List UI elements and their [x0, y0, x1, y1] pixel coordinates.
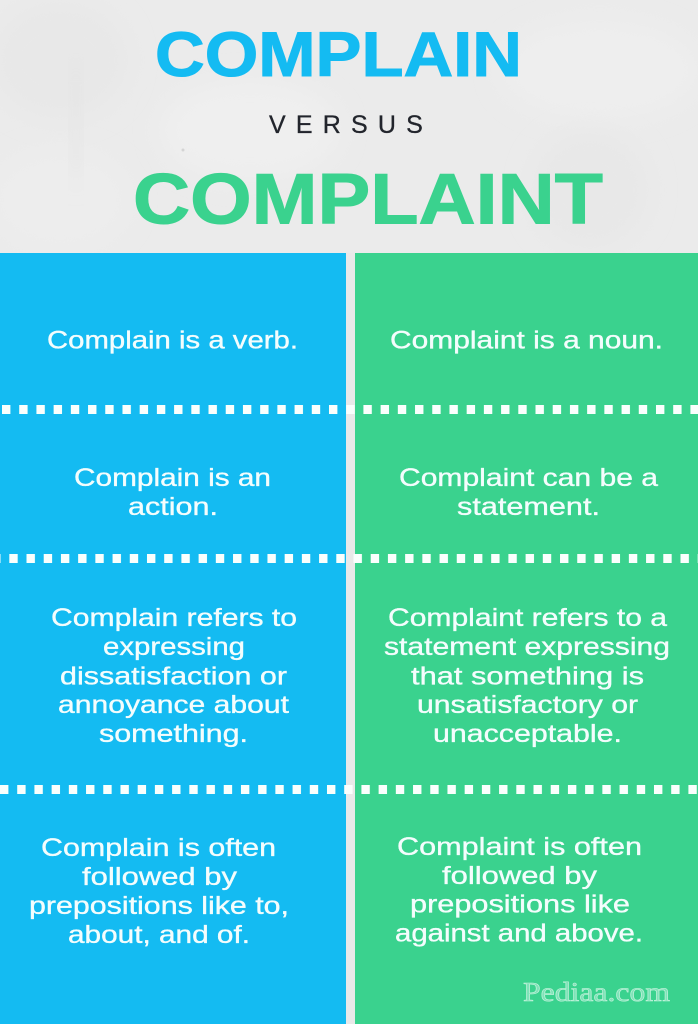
row 3: complain definition: Complain refers to — [51, 604, 297, 632]
watermark: Pediaa.com: Pediaa.com — [523, 977, 670, 1007]
panel: complain column — [0, 253, 346, 1024]
title: COMPLAINT: COMPLAINT — [133, 160, 603, 240]
row 3: complain definition: something. — [99, 720, 248, 748]
row 4: complaint prepositions: followed by — [442, 862, 598, 890]
title: COMPLAIN: COMPLAIN — [155, 20, 522, 90]
row 4: complaint prepositions — [395, 833, 643, 948]
row 4: complain prepositions — [29, 834, 289, 949]
row 3: complaint definition: that something is — [411, 662, 644, 690]
row 3: complain definition — [51, 604, 297, 748]
row 2: complain is an action: Complain is an — [74, 464, 271, 492]
background: grey marble header — [0, 0, 698, 253]
row 2: complain is an action: action. — [128, 493, 218, 521]
panel: complaint column — [355, 253, 698, 1024]
row 4: complain prepositions: followed by — [82, 863, 238, 891]
row 4: complaint prepositions: Complaint is often — [397, 833, 642, 861]
row 2: complain is an action — [74, 464, 271, 521]
row 3: complain definition: expressing — [103, 633, 245, 661]
row 3: complaint definition — [384, 604, 670, 748]
row 3: complaint definition: Complaint refers to a — [388, 604, 667, 632]
row 1: complain part of speech: Complain is a verb. — [47, 326, 298, 354]
subtitle: VERSUS: VERSUS — [269, 111, 433, 139]
row 2: complaint can be a statement: statement. — [457, 493, 600, 521]
row 4: complain prepositions: prepositions like to, — [29, 892, 289, 920]
row 2: complaint can be a statement — [399, 464, 658, 521]
row 4: complain prepositions: Complain is often — [41, 834, 276, 862]
row 3: complaint definition: unsatisfactory or — [417, 691, 638, 719]
row 4: complaint prepositions: against and above. — [395, 920, 643, 948]
row 1: complaint part of speech: Complaint is a noun. — [390, 326, 663, 354]
row 3: complain definition: dissatisfaction or — [60, 662, 287, 690]
row 2: complaint can be a statement: Complaint can be a — [399, 464, 658, 492]
row 4: complain prepositions: about, and of. — [68, 921, 250, 949]
row 3: complaint definition: statement expressing — [384, 633, 670, 661]
row 4: complaint prepositions: prepositions like — [410, 890, 630, 918]
row 3: complain definition: annoyance about — [58, 691, 289, 719]
row 3: complaint definition: unacceptable. — [433, 720, 622, 748]
